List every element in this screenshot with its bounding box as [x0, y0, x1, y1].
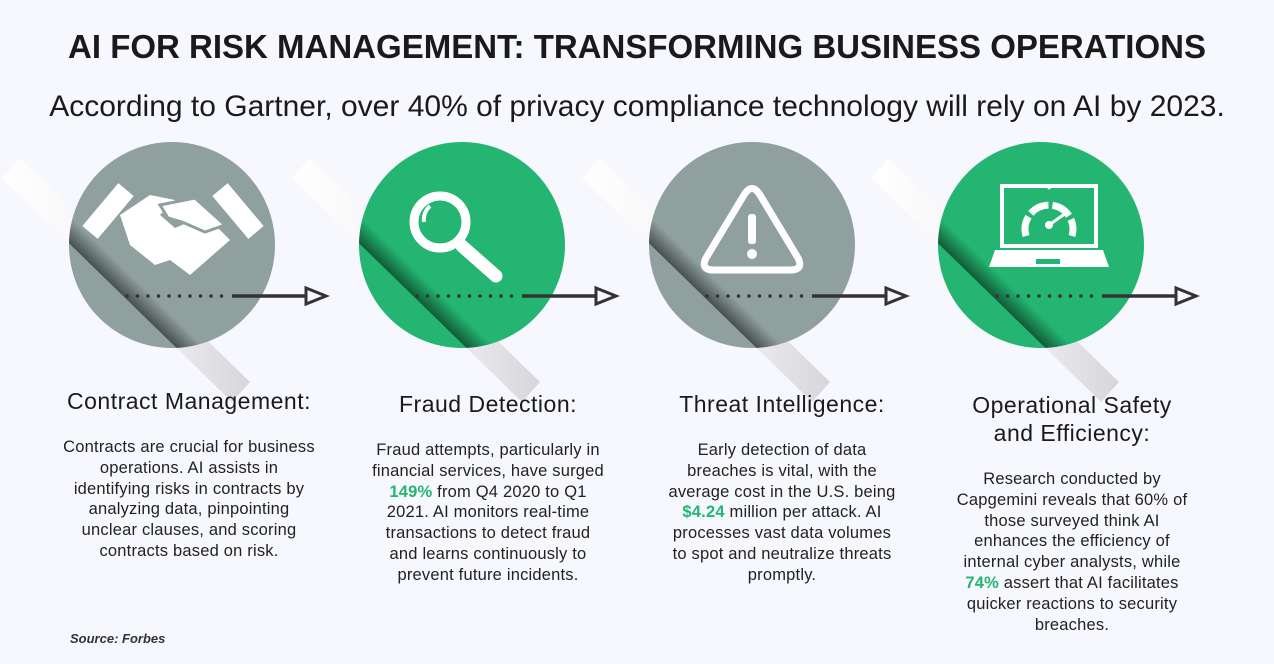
source note: Source: Forbes	[70, 631, 165, 646]
panel: operational safety: Operational Safety	[972, 392, 1172, 418]
panel: contract management: identifying risks in contracts by	[74, 480, 304, 498]
panel: fraud detection: 149% from Q4 2020 to Q1	[389, 483, 587, 501]
panel: operational safety: enhances the efficiency of	[974, 532, 1170, 550]
panel: operational safety	[957, 392, 1188, 634]
panel: fraud detection: 2021. AI monitors real-time	[387, 503, 589, 521]
item 2: fraud detection icon	[359, 142, 565, 401]
panel: fraud detection: and learns continuously to	[390, 545, 586, 563]
panel: threat intelligence	[668, 391, 896, 584]
item 4: operational safety icon	[938, 142, 1144, 402]
panel: threat intelligence: average cost in the U.S. being	[668, 483, 896, 501]
panel: threat intelligence: processes vast data volumes	[673, 524, 891, 542]
panel: threat intelligence: breaches is vital, with the	[687, 462, 877, 480]
panel: contract management	[63, 388, 315, 560]
panel: fraud detection: transactions to detect fraud	[386, 524, 590, 542]
subtitle: According to Gartner, over 40% of privacy compliance technology will rely on AI by 2023.	[49, 90, 1225, 123]
arrows	[127, 288, 1196, 304]
item 3: threat intelligence icon	[649, 142, 855, 402]
panel: contract management: unclear clauses, and scoring	[82, 521, 296, 539]
panel: fraud detection: Fraud attempts, particularly in	[376, 441, 600, 459]
panel: fraud detection: financial services, have surged	[372, 462, 604, 480]
panel: fraud detection: Fraud Detection:	[399, 391, 577, 417]
panel: fraud detection: prevent future incidents.	[397, 566, 579, 584]
panel: operational safety: Research conducted by	[983, 470, 1161, 488]
panel: operational safety: 74% assert that AI facilitates	[965, 574, 1179, 592]
panel: threat intelligence: promptly.	[748, 566, 816, 584]
panel: operational safety: quicker reactions to security	[967, 595, 1177, 613]
panel: threat intelligence: $4.24 million per attack. AI	[682, 503, 882, 521]
panel: operational safety: Capgemini reveals that 60% of	[957, 491, 1187, 509]
panel: threat intelligence: Early detection of data	[698, 441, 866, 459]
diagram: circles, icons and arrows	[69, 142, 1200, 402]
panel: operational safety: and Efficiency:	[994, 420, 1150, 446]
panel: contract management: analyzing data, pinpointing	[89, 500, 289, 518]
panel: fraud detection	[372, 391, 604, 584]
panel: operational safety: internal cyber analysts, while	[964, 553, 1180, 571]
panel: contract management: operations. AI assists in	[100, 459, 278, 477]
panel: contract management: Contracts are crucial for business	[63, 438, 315, 456]
title: AI FOR RISK MANAGEMENT: TRANSFORMING BUSINESS OPERATIONS	[68, 28, 1206, 65]
panel: operational safety: breaches.	[1035, 616, 1109, 634]
panel: operational safety: those surveyed think AI	[984, 512, 1160, 530]
item 1: contract management icon	[69, 142, 275, 402]
panel: threat intelligence: to spot and neutralize threats	[673, 545, 891, 563]
panel: threat intelligence: Threat Intelligence:	[679, 391, 885, 417]
panel: contract management: Contract Management:	[67, 388, 311, 414]
panel: contract management: contracts based on risk.	[99, 542, 279, 560]
